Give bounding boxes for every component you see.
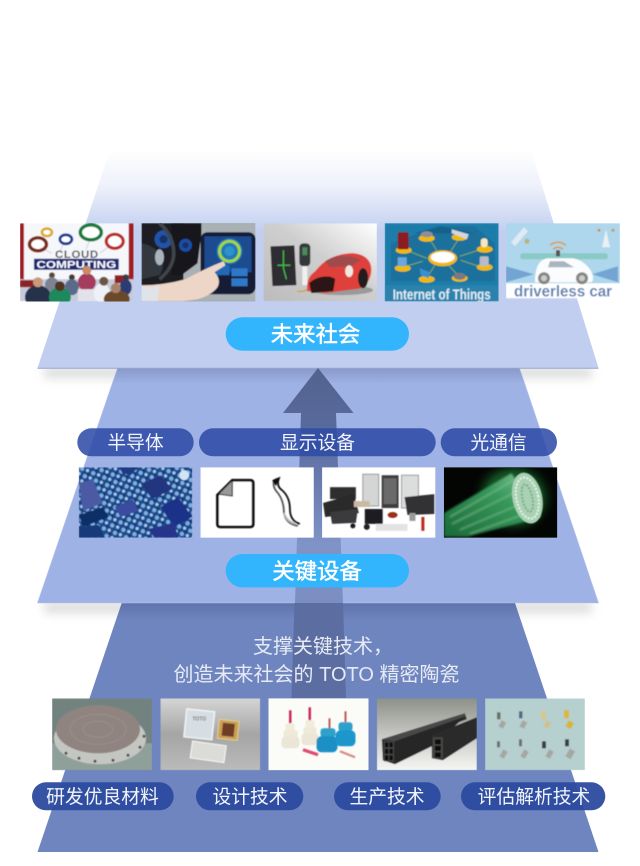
- image: electric car charging: [264, 223, 377, 302]
- image: chip packages: [160, 698, 260, 770]
- pill: semiconductor: [77, 428, 194, 456]
- label pill: key devices: 关键设备: [272, 559, 362, 584]
- pill: production technology: 生产技术: [349, 786, 425, 807]
- image: optical fiber bundle: [444, 467, 558, 538]
- pill: evaluation and analysis technology: [461, 782, 605, 810]
- label pill: future society: [226, 317, 409, 351]
- shadow under key devices tier: [44, 602, 592, 613]
- pill: display devices: 显示设备: [280, 432, 355, 453]
- pill: optical communication: 光通信: [470, 432, 527, 453]
- text block: TOTO slogan second line: 创造未来社会的 TOTO 精密陶瓷: [174, 663, 459, 686]
- image: display equipment parts: [322, 467, 436, 538]
- image: cloud computing: [20, 223, 134, 302]
- pyramid tier: key devices: [38, 368, 598, 603]
- image: ceramic parts white and blue: [268, 698, 368, 770]
- image: cloud computing: COMPUTING: [36, 260, 117, 271]
- pill: design technology: [196, 782, 303, 810]
- pill: optical communication: [441, 428, 557, 456]
- image: internet of things: [384, 223, 499, 303]
- pill: display devices: [199, 428, 436, 456]
- shadow under future society tier: [44, 367, 592, 378]
- label pill: key devices: [226, 554, 409, 587]
- pyramid tier: base technology: [38, 603, 598, 852]
- pill: evaluation and analysis technology: 评估解析技术: [478, 786, 591, 807]
- image: cloud computing: CLOUD: [55, 249, 99, 261]
- upward arrow: [283, 368, 354, 698]
- image: car touch dashboard: [142, 223, 256, 302]
- text block: TOTO slogan: 支撑关键技术，: [253, 635, 393, 658]
- image: chip packages: TOTO: [192, 716, 206, 722]
- panel: core technology images: [52, 698, 585, 770]
- panel: key device images: [79, 457, 557, 538]
- image: small metal fittings: [485, 698, 585, 770]
- pill: semiconductor: 半导体: [107, 432, 164, 453]
- pill: design technology: 设计技术: [212, 786, 288, 807]
- pill: material development: [32, 782, 174, 810]
- pill: production technology: [334, 782, 441, 810]
- panel: future society images: [20, 223, 620, 309]
- image: driverless car: [506, 223, 620, 300]
- image: driverless car: driverless car: [514, 283, 612, 300]
- image: circuit board: [78, 467, 192, 538]
- panel: core technology pills: [32, 782, 605, 810]
- label pill: future society: 未来社会: [271, 322, 360, 347]
- image: black ceramic beams: [376, 698, 477, 770]
- image: display film parts: [200, 467, 314, 538]
- panel: key device category pills: [77, 428, 557, 456]
- image: ceramic disk: [52, 698, 152, 770]
- pill: material development: 研发优良材料: [46, 786, 159, 807]
- pyramid tier: future society: [38, 150, 598, 368]
